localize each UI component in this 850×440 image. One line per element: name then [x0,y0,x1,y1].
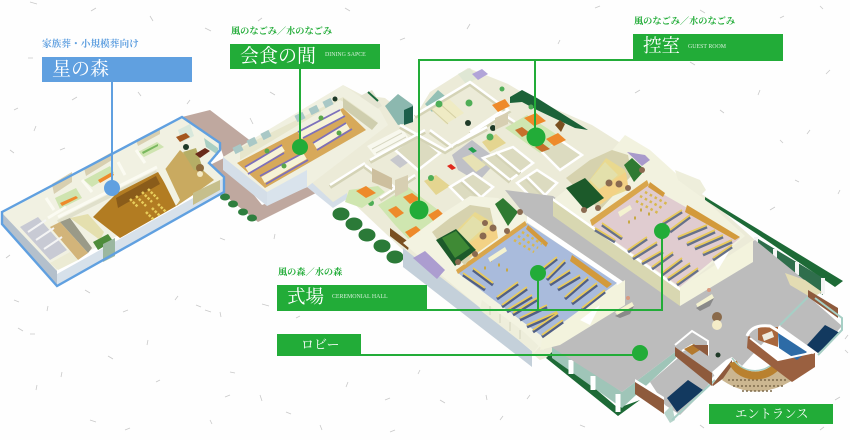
label: 控室 [633,34,783,61]
marker: 式場 blue hall [530,265,546,281]
label: 会食の間: DINING SAPCE [325,52,366,58]
dining wing [223,85,388,206]
blue hall walls [418,196,625,350]
label: 星の森 [42,57,192,82]
hedge by annex [220,194,257,222]
label: エントランス: エントランス [735,407,808,421]
annex tree [183,144,189,150]
brick room [675,347,712,386]
dining back wall [240,97,378,160]
curved counter [733,362,777,376]
plants [368,86,534,206]
label: ロビー: ロビー [301,337,339,352]
pink hall seats [595,212,732,285]
left wing floor [650,358,712,415]
label: 会食の間: 会食の間 [240,46,316,67]
annex hall chairs [130,189,166,220]
teal rooms [425,90,445,112]
subtitle: 控室: 風のなごみ／水のなごみ [634,16,735,26]
dark green back glass [510,90,588,130]
dining windows [234,101,332,151]
wall blocks [395,135,582,207]
guest rooms [345,99,566,250]
central rooms block [307,68,755,360]
dining plants [264,116,342,168]
reception desk left [615,302,634,316]
reception desk right [696,294,714,308]
blue ceremonial hall [418,196,625,350]
back green strip [705,197,843,287]
lobby sofas [785,273,822,298]
pink hall shelves [675,170,706,196]
brick wall left [635,381,664,414]
label: 星の森: 星の森 [52,59,109,80]
outer wall lower left [307,178,347,208]
annex foyer carpet [163,150,214,205]
annex partition walls [46,150,157,218]
annex glass doors [103,238,115,262]
flower vase [712,312,722,322]
label: ロビー [277,334,361,356]
annex altar [70,214,104,240]
label: 式場: 式場 [287,288,324,308]
lobby floor [505,190,843,416]
lounge sofas [430,98,464,124]
annex office [178,124,194,142]
leader: 式場 [427,231,662,310]
mats [447,164,456,170]
subtitle: 式場: 風の森／水の森 [278,267,342,277]
leader: 控室 [419,60,634,210]
leader lines [112,60,662,355]
leader: ロビー [361,354,640,356]
marker: 式場 pink hall [654,223,670,239]
pink hall floor [592,185,740,287]
right wing [780,296,842,353]
blue hall seats [463,259,605,337]
pink hall walls [553,135,745,290]
service rooms [360,90,382,112]
annex wooden hall floor [93,172,178,238]
blue hall floor [458,223,617,337]
annex tan corridor and toilets [50,222,88,260]
grey corridor central [452,140,498,182]
hedges [332,208,404,264]
leader: 星の森 [111,82,113,188]
brick central wing [747,335,815,382]
lobby carpet [505,190,808,392]
label: 会食の間 [230,44,380,69]
label: 式場 [277,285,427,311]
label: 控室: GUEST ROOM [688,44,726,50]
entrance [635,290,842,423]
storage shelves [367,128,410,160]
front green strip [546,352,640,416]
subtitle: 家族葬: 家族葬・小規模葬向け [42,39,139,50]
pink ceremonial hall [553,135,753,306]
guest room right [505,115,562,153]
wall lines [330,84,547,200]
ceremonial wing side wall [403,232,550,367]
dining floor [237,108,366,188]
brick pavement [182,110,318,222]
gravel garden [722,364,793,392]
label: エントランス [709,404,833,424]
annex tatami rooms [55,188,82,209]
marker: 星の森 [104,180,120,196]
annex walls and base [2,117,224,286]
pink hall altar [566,150,632,210]
lobby furniture [615,288,722,330]
label: 式場: CEREMONIAL HALL [332,294,388,300]
guest room left [378,187,442,243]
blue hall altar [432,205,495,265]
marker: 控室 right [526,128,546,146]
annex shoji screens [52,172,72,194]
dark blue mat left [667,380,703,412]
leader: 会食の間 [299,69,301,147]
marker: 控室 left [410,200,428,220]
dining tables [247,113,348,180]
markers [104,128,670,361]
annex building: 星の森 [2,117,224,286]
sofa rooms [482,134,506,152]
blue water [778,333,807,360]
label: 控室: 控室 [643,37,680,57]
marker: 会食の間 [292,139,308,155]
annex blue outline [2,117,224,286]
subtitle: 会食の間: 風のなごみ／水のなごみ [231,26,332,36]
marker: ロビー [632,345,648,361]
